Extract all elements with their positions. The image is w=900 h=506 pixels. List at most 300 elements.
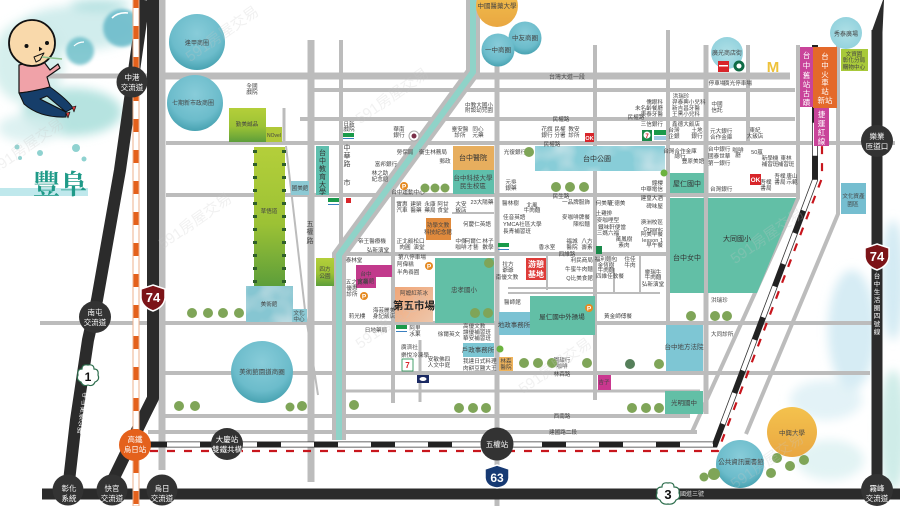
street and shop labels: 牛肉麵 xyxy=(524,206,541,214)
block: 光明國中: 光明國中 xyxy=(671,398,697,407)
street and shop labels: 新學機 xyxy=(762,154,779,162)
block: 游憩基地: 游憩 xyxy=(528,259,544,269)
street and shop labels: 光復銀行 xyxy=(504,148,527,156)
street and shop labels: 建榮 xyxy=(410,200,422,208)
street and shop labels: 靈瑞牛 xyxy=(645,268,662,276)
street and shop labels: 示範 xyxy=(786,178,798,186)
street and shop labels: 吾樸 xyxy=(760,178,772,186)
street and shop labels: 陳松麵 xyxy=(573,220,590,228)
label: 中山高速公路: 高 xyxy=(80,406,86,414)
label: 中山高速公路: 中 xyxy=(82,392,88,400)
street and shop labels: 補習班 xyxy=(778,160,795,168)
street and shop labels: 停車場 xyxy=(709,79,726,87)
street and shop labels: 爺爺 xyxy=(502,266,514,274)
street and shop labels: 阿甘 xyxy=(437,200,449,208)
map pin markers: P xyxy=(587,306,592,312)
street and shop labels: 林之助 xyxy=(372,169,389,177)
block: 台中教育大學: 教 xyxy=(319,164,326,173)
logo: 7-Eleven stores: 7 xyxy=(645,134,649,140)
street and shop labels: 一品牌服飾 xyxy=(562,198,590,206)
block: 第五市場 xyxy=(393,287,435,322)
street and shop labels: 實惠 xyxy=(396,200,408,208)
block: 台中火車站新站 xyxy=(813,47,837,108)
street and shop labels: 正德美 xyxy=(609,199,626,207)
block: 文化中心: 中心 xyxy=(293,315,305,323)
street and shop labels: 八方 xyxy=(581,237,593,245)
logo: 7-Eleven stores: 7 xyxy=(405,361,410,370)
street and shop labels: 國泰世華 xyxy=(708,152,731,160)
street and shop labels: 新吉昌牙醫 xyxy=(672,104,700,112)
street and shop labels: 林森路 xyxy=(554,370,571,378)
label: 台中生活圈四號線 xyxy=(874,271,881,336)
street and shop labels: 分署 xyxy=(554,132,566,139)
street and shop labels: 民權路 xyxy=(628,113,645,121)
block: 台中地方法院 xyxy=(664,325,704,371)
street and shop labels: 黃金師傅餐 xyxy=(604,312,632,320)
label: 中山高速公路: 路 xyxy=(77,427,83,435)
high speed rail line xyxy=(133,0,139,506)
block: 捷運紅線: 紅 xyxy=(818,127,826,137)
street and shop labels: 路 xyxy=(344,159,350,168)
street and shop labels: 民權路 xyxy=(544,140,561,148)
block: 台中舊站古蹟: 中 xyxy=(803,60,810,70)
street and shop labels: 水果 xyxy=(409,330,421,338)
block: 地政事務所 xyxy=(498,312,531,335)
block: 屋仁國中 xyxy=(670,173,704,193)
block: pink small: 吉子 xyxy=(598,379,610,386)
watercolor circles xyxy=(167,0,862,488)
district title: 豐阜: 豐阜 xyxy=(33,170,87,200)
block: 台中火車站新站: 台 xyxy=(821,51,829,61)
street and shop labels: 食堂 xyxy=(437,206,449,214)
block: 台中科技大學: 民生校區 xyxy=(460,181,486,190)
block: 捷運紅線 xyxy=(814,108,829,146)
street and shop labels: 日地藥局 xyxy=(365,326,388,334)
street and shop labels: 拉方 xyxy=(502,260,514,268)
street and shop labels: 台灣銀行 xyxy=(710,185,733,193)
street and shop labels: 中教大國小 xyxy=(465,101,493,109)
label: 中山高速公路: 山 xyxy=(81,399,87,407)
street and shop labels: 何美華 xyxy=(596,199,613,207)
block: 台中舊站古蹟 xyxy=(800,47,813,107)
street trees xyxy=(174,147,809,482)
node: 大慶站: 雙鐵共構 xyxy=(212,444,242,454)
street and shop labels: 何慶仁英語 xyxy=(463,220,491,228)
block: 台中公園: 台中公園 xyxy=(583,154,611,163)
block: 文化部資產園區 green: 彰化分局 xyxy=(843,56,866,64)
label: 中山高速公路: 速 xyxy=(79,413,85,421)
block: 光明國中 xyxy=(665,391,703,414)
street and shop labels: 民權路 xyxy=(553,115,570,123)
street and shop labels: 銀行 xyxy=(541,131,553,139)
node: 烏日交流道 xyxy=(146,474,178,506)
block: 文化資產園區: 園區 xyxy=(847,201,859,208)
label: 中山高速公路: 公 xyxy=(78,421,84,428)
node: 大慶站 xyxy=(211,428,243,460)
watermarks: 591房屋交易 xyxy=(352,289,432,353)
block: 文教館 pink xyxy=(356,265,392,288)
street and shop labels: 阿里 xyxy=(409,324,421,332)
block: 文化資產園區: 文化 xyxy=(842,192,854,200)
street and shop labels: 弘新演堂 xyxy=(367,246,390,254)
street and shop labels: 民權 xyxy=(554,125,566,133)
circle: 公共資訊圖書館 xyxy=(716,440,764,488)
shield 74 left xyxy=(141,285,165,311)
node: 高鐵烏日站: 烏日站 xyxy=(124,444,147,454)
street and shop labels: 樂悅冷凍學 xyxy=(401,351,429,359)
street and shop labels: 林子 xyxy=(482,237,494,245)
street and shop labels: 中華電信 xyxy=(641,185,663,193)
street and shop labels: 咖啡 xyxy=(732,146,744,154)
street and shop labels: 五之寶藥 xyxy=(346,278,369,286)
street and shop labels: 花旗 xyxy=(541,125,553,133)
watercolor bubbles xyxy=(66,9,141,65)
block: 國美館: 國美館 xyxy=(292,184,309,192)
label: 台中生活圈四號線: 活 xyxy=(874,295,881,304)
street and shop labels: 海芸麗美 xyxy=(373,306,396,314)
block: 功學文教: 功學文教 xyxy=(427,221,450,229)
block: 台中舊站古蹟: 站 xyxy=(803,79,811,89)
watercolor wash: left xyxy=(0,0,138,142)
street and shop labels: 演堂 xyxy=(413,243,425,251)
street and shop labels xyxy=(246,73,798,436)
street and shop labels: 中國 xyxy=(711,100,723,108)
node: 樂業匝道口: 匝道口 xyxy=(866,141,888,151)
block: 草悟道: 草悟道 xyxy=(261,207,278,215)
block: 草悟道 xyxy=(254,147,285,286)
street and shop labels: 豐原美語 xyxy=(682,157,705,165)
street and shop labels: 福城 xyxy=(566,237,578,245)
shield 1 xyxy=(77,365,99,386)
block: 台中火車站新站: 火 xyxy=(821,70,829,79)
block: 台中教育大學: 中 xyxy=(319,156,326,165)
street and shop labels: 診所 xyxy=(454,131,466,139)
street and shop labels: 教安 xyxy=(568,125,580,133)
street and shop labels: 50嵐 xyxy=(751,148,763,156)
label: 台中生活圈四號線: 台 xyxy=(874,271,880,280)
street and shop labels: 咖啡 xyxy=(556,362,568,370)
map pin markers: P xyxy=(402,184,407,190)
street and shop labels: 儒眼科 xyxy=(646,98,663,106)
street and shop labels: 戲院 xyxy=(343,125,355,133)
street and shop labels: 佳音英語 xyxy=(503,213,526,221)
label: 台中生活圈四號線: 線 xyxy=(874,327,881,336)
node: 南屯交流道: 交流道 xyxy=(84,317,107,327)
street and shop labels: 牛肉麵 xyxy=(598,266,615,274)
street and shop labels: 飯店 xyxy=(455,206,467,214)
street and shop labels: 銀藥 xyxy=(505,184,517,192)
node: 霧峰交流道 xyxy=(861,474,893,506)
circle: 一中商圈 xyxy=(482,34,514,66)
street and shop labels: 我達日式料理 xyxy=(463,357,497,365)
block: 文化部資產園區 green: 文資園 xyxy=(846,50,863,58)
node: 快官交流道 xyxy=(96,474,128,506)
street and shop labels: 牛蜜牛肉麵 xyxy=(565,265,593,273)
street and shop labels: 第一銀行 xyxy=(708,159,731,167)
block: 四方公園: 四方 xyxy=(319,265,331,273)
logo: hospital cross emblem xyxy=(409,131,419,141)
street and shop labels: 永康 xyxy=(424,200,436,208)
map pin markers xyxy=(360,170,668,352)
circle: 七期新市政商圈: 七期新市政商圈 xyxy=(172,99,214,107)
street and shop labels: 住佳 xyxy=(624,255,636,263)
street and shop labels: 勞保局 xyxy=(397,148,414,156)
label: 台中生活圈四號線: 中 xyxy=(874,279,880,288)
street and shop labels: 素肉 xyxy=(618,241,630,249)
shield 74 left: 74 xyxy=(146,290,161,305)
block: 第五市場: 第五市場 xyxy=(393,299,435,312)
block: 台中醫院: 台中醫院 xyxy=(459,153,487,162)
watercolor wash: right xyxy=(790,220,900,490)
circle: 中友商圈 xyxy=(508,22,542,54)
street and shop labels: 徐爾英文 xyxy=(438,330,461,338)
street and shop labels: 銀行 xyxy=(691,132,703,140)
street and shop labels: 戲院 xyxy=(246,88,258,96)
block: 台中教育大學: 大 xyxy=(319,180,326,189)
block: 國美館 xyxy=(291,181,309,195)
circle: 一中商圈: 一中商圈 xyxy=(485,45,511,54)
block: 台中火車站新站: 中 xyxy=(821,60,829,70)
block: 捷運紅線: 線 xyxy=(818,136,826,146)
street and shop labels: 台灣 xyxy=(668,126,680,134)
canal xyxy=(339,0,473,440)
street and shop labels: 高優文教 xyxy=(463,322,486,330)
street and shop labels: 才藝 xyxy=(467,243,479,251)
street and shop labels: 合作金庫 xyxy=(710,133,733,141)
circle: 中興大學 xyxy=(767,407,817,457)
street and shop labels: 人文中庭 xyxy=(428,361,451,369)
street and shop labels: 五 xyxy=(306,220,314,228)
block: 忠孝國小: 忠孝國小 xyxy=(451,285,478,294)
street and shop labels: 土地 xyxy=(691,126,703,134)
block: 台中教育大學: 台 xyxy=(319,148,326,157)
node: 樂業匝道口: 樂業 xyxy=(870,131,885,141)
node: 彰化系統 xyxy=(52,474,84,506)
block: 戶政事務所: 戶政事務所 xyxy=(462,345,495,354)
block: 文化部資產園區 green xyxy=(841,49,868,71)
block: 台中科技大學 xyxy=(453,170,494,194)
street and shop labels: 福利麵包 xyxy=(595,255,618,263)
node: 大慶站: 大慶站 xyxy=(216,434,239,444)
street and shop labels: 壽素 xyxy=(581,243,593,251)
block: 戶政事務所 xyxy=(462,343,495,357)
logo: 新光三越 xyxy=(718,61,729,72)
highway shields xyxy=(77,244,889,504)
circle: 秀泰廣場: 秀泰廣場 xyxy=(834,30,858,38)
street and shop labels: 身記飯店 xyxy=(373,312,396,320)
logo: OK mart 1: OK xyxy=(585,136,594,142)
block: 捷運紅線: 捷 xyxy=(818,109,826,119)
block: 台中火車站新站: 車 xyxy=(821,77,829,87)
block: 文化部資產園區 green: 購物中心 xyxy=(843,63,866,71)
watermarks: 591房屋交易 xyxy=(727,429,807,493)
label: 台中生活圈四號線: 生 xyxy=(874,287,881,296)
node: 彰化系統: 系統 xyxy=(62,493,77,503)
block: 文教館 pink: 台中 xyxy=(360,270,372,278)
street and shop labels: 阿偉糕 xyxy=(397,260,414,268)
street and shop labels: 東泰牙醫 xyxy=(641,110,663,118)
street and shop labels: 書局 xyxy=(774,178,786,186)
street and shop labels: 半角養園 xyxy=(397,268,420,276)
block: 勤美綠園: NOvel xyxy=(267,133,281,139)
watermarks: 591房屋交易 xyxy=(727,204,807,268)
watermarks: 591房屋交易 xyxy=(182,2,262,66)
street and shop labels: 西南路 xyxy=(554,412,571,420)
street and shop labels: 何爾仁 xyxy=(465,237,482,245)
street and shop labels: 牛肉 xyxy=(624,261,636,269)
circle: 美術館園道商圈 xyxy=(231,341,293,403)
block: 大同國小: 大同國小 xyxy=(723,234,751,243)
street and shop labels: 華南 xyxy=(393,125,405,133)
block: 台中舊站古蹟: 舊 xyxy=(803,70,811,80)
street and shop labels: 碑味屋 xyxy=(646,202,663,210)
street and shop labels: 三信銀行 xyxy=(641,120,663,128)
block: 美術館: 美術館 xyxy=(261,300,278,308)
label: 中山高速公路 xyxy=(77,392,88,435)
block: 台中科技大學: 台中科技大學 xyxy=(454,173,493,182)
street and shop labels: 三媽六福 xyxy=(597,229,620,237)
street and shop labels: 汽車 xyxy=(396,206,408,214)
street and shop labels: 大同診所 xyxy=(711,330,734,338)
shield 63: 63 xyxy=(490,471,504,485)
circle: 潭甲商圈 xyxy=(169,14,225,70)
block: 忠孝國小 xyxy=(435,258,494,323)
street and shop labels: 園甜行 xyxy=(554,356,571,364)
street and shop labels: 澳洲校區 xyxy=(641,218,663,226)
block: 台中教育大學: 學 xyxy=(319,187,326,196)
wash droplets xyxy=(14,144,86,162)
circle: 中興大學: 中興大學 xyxy=(779,428,806,437)
block: 文教館 pink: 文藝館 xyxy=(358,277,375,285)
logo: 全聯 navy xyxy=(417,375,429,383)
block: 台中女中 xyxy=(670,198,704,293)
circle: 秀泰廣場 xyxy=(830,17,862,49)
street and shop labels: 安敏佛四 xyxy=(428,355,451,363)
block: 功學文教: 科技紀念館 xyxy=(424,228,452,236)
street and shop labels: 洪瑞珍 xyxy=(711,296,728,304)
block: 台中舊站古蹟: 古 xyxy=(803,88,811,98)
street and shop labels: 肉圓 xyxy=(399,243,411,251)
street and shop labels: 北風 xyxy=(526,201,538,209)
street and shop labels: 華安補習班 xyxy=(463,334,491,342)
node: 中港交流道 xyxy=(116,66,148,98)
street and shop labels: 鐘樓 xyxy=(652,179,663,187)
shield 74 right: 74 xyxy=(870,249,885,264)
street and shop labels: 唐山 xyxy=(786,172,798,180)
street and shop labels: 數學 xyxy=(482,243,494,251)
watermarks: 591房屋交易 xyxy=(352,64,432,128)
street and shop labels: 醫師館 xyxy=(504,298,521,306)
block: 屋仁國中外操場 xyxy=(530,296,595,335)
street and shop labels: 東林 xyxy=(780,154,792,162)
block: 台中教育大學: 育 xyxy=(319,172,326,181)
label: 台中生活圈四號線: 圈 xyxy=(874,304,880,312)
block: 台中舊站古蹟: 台 xyxy=(803,50,810,60)
district title: 豐阜 xyxy=(0,170,88,200)
circle: 中國醫藥大學: 中國醫藥大學 xyxy=(478,1,517,10)
block: 地政事務所: 地政事務所 xyxy=(498,320,531,329)
street and shop labels: 臺安醫 xyxy=(452,125,469,133)
block: 勤美綠園: 勤美誠品 xyxy=(236,120,259,128)
street and shop labels: 阿美早餐 xyxy=(641,230,663,238)
block: 屋仁國中: 屋仁國中 xyxy=(673,179,701,188)
circle: 七期新市政商圈 xyxy=(167,75,223,131)
shield 74 right xyxy=(865,244,889,270)
label: 台中生活圈四號線: 號 xyxy=(874,319,881,328)
logo: FamilyMart stores xyxy=(328,130,666,332)
street and shop labels: 廣光停車場 xyxy=(724,79,752,87)
street and shop labels: 建皇大酒 xyxy=(641,194,663,202)
street and shop labels: 優惠 xyxy=(346,284,358,292)
street and shop labels: 羿泰興小兒科 xyxy=(672,98,706,106)
block: 四方公園: 公園 xyxy=(319,273,331,280)
node: 南屯交流道 xyxy=(79,301,111,333)
street and shop labels: 泰林堂 xyxy=(346,256,363,264)
circle: 公共資訊圖書館: 公共資訊圖書館 xyxy=(718,457,764,466)
street and shop labels: 早午餐 xyxy=(646,241,663,249)
logo: OK mart 1 xyxy=(585,133,594,142)
street and shop labels: 香水室 xyxy=(539,243,556,251)
block: 屋仁國中外操場: 屋仁國中外操場 xyxy=(539,312,585,321)
street and shop labels: 台灣大道一段 xyxy=(549,73,585,81)
label: 國道三號: 國道三號 xyxy=(680,490,704,498)
street and shop labels: 企銀 xyxy=(668,132,680,140)
railway line xyxy=(143,45,815,444)
street and shop labels: 吾樸 xyxy=(774,172,786,180)
street and shop labels: 讓優補習班 xyxy=(463,328,491,336)
node: 霧峰交流道: 交流道 xyxy=(866,493,889,503)
block: 文化資產園區 xyxy=(841,183,866,214)
circle: 潭甲商圈: 逢甲商圈 xyxy=(185,39,209,47)
street and shop labels: 民生路 xyxy=(553,192,570,200)
street and shop labels: 建國路二段 xyxy=(549,428,577,436)
logo: Starbucks xyxy=(734,60,744,72)
circle: 中友商圈: 中友商圈 xyxy=(512,33,538,42)
block: pink small xyxy=(598,375,611,390)
node: 高鐵烏日站 xyxy=(119,429,151,461)
block: 文化資產園區: 資產 xyxy=(853,192,865,200)
street and shop labels: Organic xyxy=(643,227,663,233)
mascot character xyxy=(9,20,76,118)
street and shop labels: 郵政 xyxy=(439,157,451,165)
street and shop labels: 全國 xyxy=(246,83,258,90)
street and shop labels: 醫林樹 xyxy=(502,199,519,207)
street and shop labels: 補習班 xyxy=(762,160,779,168)
block: 台中教育大學 xyxy=(316,146,329,196)
block: 台中火車站新站: 站 xyxy=(821,86,829,96)
street and shop labels: 金恆樹 xyxy=(598,261,615,269)
logo: McDonald's: M xyxy=(767,59,779,76)
street and shop labels: 萬鳳樹 xyxy=(616,235,633,243)
street and shop labels: 台灣合作金庫 xyxy=(663,147,697,155)
circle: 中國醫藥大學 xyxy=(476,0,518,27)
watermarks: 591房屋交易 xyxy=(515,334,595,398)
street and shop labels: 咖啡 xyxy=(455,243,467,251)
street and shop labels: 洪瑞珍 xyxy=(673,92,690,100)
block: 台中醫院 xyxy=(453,146,494,170)
node: 中港交流道: 中港 xyxy=(124,72,140,82)
node: 快官交流道: 交流道 xyxy=(101,493,124,503)
block: 林森醫院: 醫院 xyxy=(500,363,512,371)
street and shop labels: 中 xyxy=(344,143,350,152)
street and shop labels: 衛生林務局 xyxy=(419,148,447,156)
circle: 廣光商店街: 廣光商店街 xyxy=(712,49,742,57)
street and shop labels: 利民商局 xyxy=(571,256,593,264)
street and shop labels: 醫院 xyxy=(566,243,578,251)
node: 中港交流道: 交流道 xyxy=(121,82,144,92)
street and shop labels: 華 xyxy=(344,151,350,160)
street and shop labels: 紀念館 xyxy=(372,175,389,183)
